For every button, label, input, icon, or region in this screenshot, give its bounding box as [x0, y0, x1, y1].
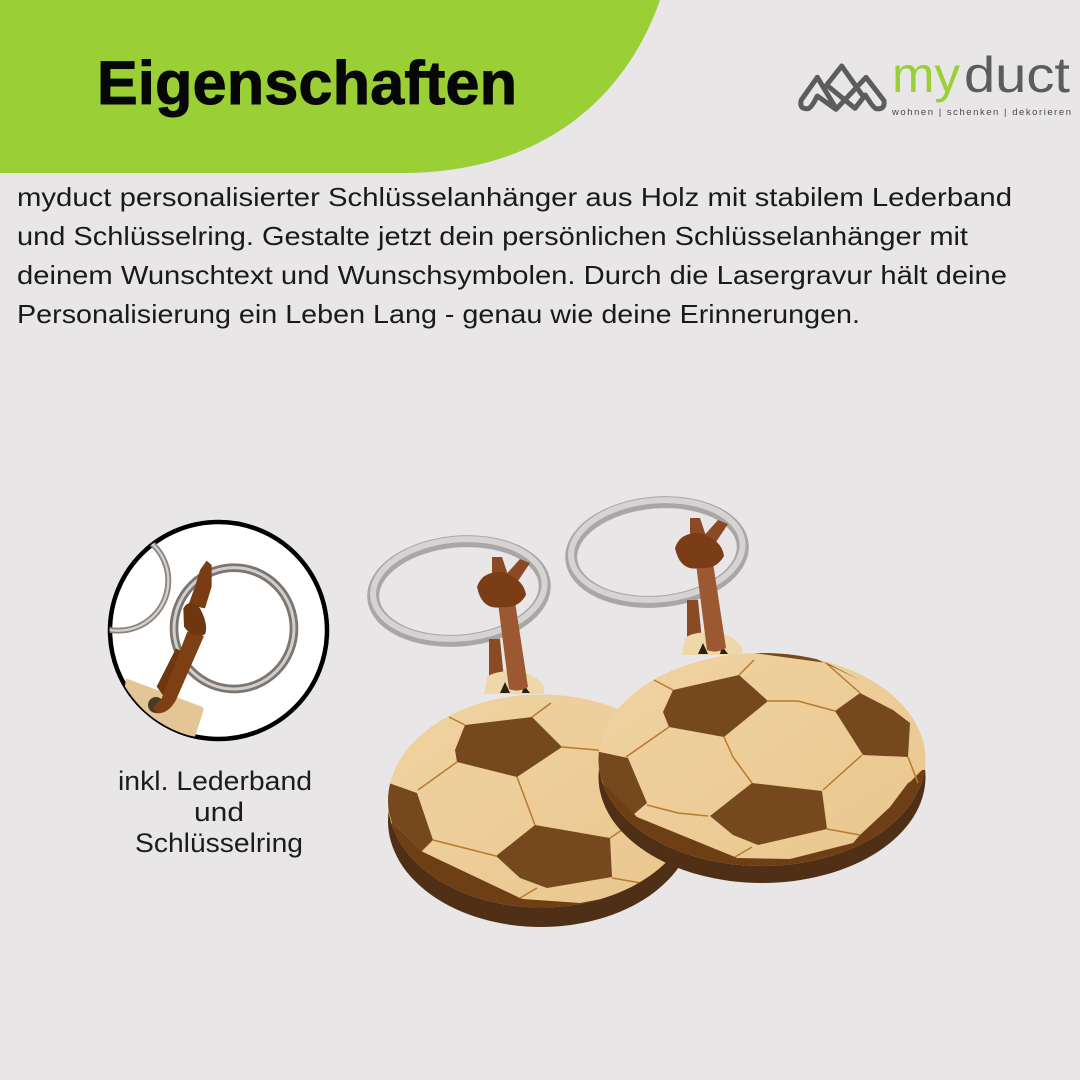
right ball edge [598, 671, 926, 883]
right ball seams [626, 660, 918, 857]
leather band front strand [153, 632, 204, 713]
left tab [484, 671, 544, 694]
logo tagline: wohnen | schenken | dekorieren [891, 107, 1071, 118]
leather band upper ends [188, 561, 212, 608]
left ball top pentagon [455, 717, 562, 777]
title: Eigenschaften [97, 49, 517, 117]
tag hole [148, 697, 161, 713]
right leather band front strand [695, 556, 726, 652]
right ball face [598, 653, 926, 866]
right leather knot [675, 533, 724, 569]
left leather knot [477, 572, 526, 608]
logo wordmark dark part: duct [964, 47, 1070, 103]
green header shape [0, 0, 660, 173]
right tab holes [698, 643, 728, 654]
left ball face [388, 694, 694, 908]
inset caption: inkl. Lederband [118, 766, 312, 796]
right ball pattern [598, 653, 925, 866]
description text: myduct personalisierter Schlüsselanhänger aus Holz mit stabilem Lederband [17, 182, 1012, 212]
right ball top pentagon [663, 675, 768, 737]
left leather band front strand [497, 595, 528, 691]
right leather band back strand [687, 600, 702, 640]
right ball top rim [754, 653, 860, 680]
description text [17, 182, 1012, 329]
left leather band back strand [489, 639, 504, 679]
description text: und Schlüsselring. Gestalte jetzt dein persönlichen Schlüsselanhänger mit [17, 221, 969, 251]
right tab [682, 632, 742, 655]
logo mark: mountains [801, 66, 884, 109]
leather band back strand [156, 648, 180, 696]
right key chain hardware [567, 493, 747, 655]
key ring [174, 568, 294, 689]
inset caption [118, 766, 312, 858]
left ball pattern [388, 702, 640, 908]
description text: deinem Wunschtext und Wunschsymbolen. Durch die Lasergravur hält deine [17, 260, 1007, 290]
left ball seams [418, 703, 647, 898]
second ring fragment [110, 542, 172, 634]
left tab holes [500, 682, 530, 693]
description text: Personalisierung ein Leben Lang - genau wie deine Erinnerungen. [17, 299, 860, 329]
left leather band upper ends [492, 557, 530, 587]
left key chain hardware [369, 532, 549, 694]
logo wordmark: my [892, 47, 960, 103]
right leather band upper ends [690, 518, 728, 548]
left ball bottom rim [392, 823, 600, 908]
right key ring [567, 493, 747, 609]
left ball rim patches [388, 784, 433, 851]
right ball bottom pentagon [710, 783, 827, 845]
right ball bottom rim [602, 770, 925, 866]
wooden tag [120, 678, 203, 737]
leather knot [183, 603, 206, 636]
right ball side pentagon [835, 693, 910, 757]
left ball bottom pentagon [496, 825, 612, 888]
logo: myduct [801, 47, 1071, 118]
left key ring [369, 532, 549, 648]
inset caption: und [194, 797, 244, 827]
left ball edge [388, 715, 694, 927]
right ball left rim [598, 752, 647, 814]
product photo: two football key chains [369, 493, 940, 940]
inset caption: Schlüsselring [135, 828, 303, 858]
inset circle: leather band and key ring detail [108, 520, 330, 742]
